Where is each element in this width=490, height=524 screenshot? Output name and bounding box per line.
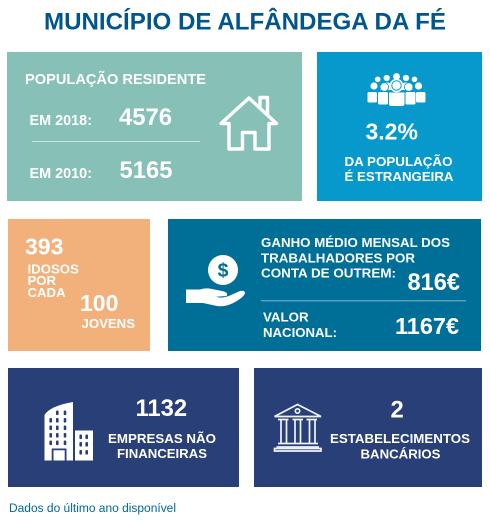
- caption: foreign population: É ESTRANGEIRA: [344, 169, 454, 184]
- caption: foreign population: [344, 154, 454, 184]
- caption: companies: FINANCEIRAS: [117, 446, 207, 461]
- value: elderly: 393: [25, 234, 63, 260]
- caption: companies: [108, 431, 216, 461]
- panel: resident population: [7, 52, 302, 201]
- caption: companies: EMPRESAS NÃO: [108, 431, 216, 446]
- icon: crowd of people: [368, 73, 426, 106]
- label: elderly per: IDOSOS: [28, 261, 79, 276]
- value: foreign share: 3.2%: [366, 118, 418, 144]
- label: young: JOVENS: [82, 316, 135, 331]
- value: 2018: 4576: [119, 104, 172, 131]
- label: 2010: EM 2010:: [30, 166, 92, 182]
- panel: foreign population: [317, 52, 482, 201]
- title: MUNICÍPIO DE ALFÂNDEGA DA FÉ: [44, 8, 446, 36]
- label: 2018: EM 2018:: [30, 113, 92, 129]
- heading: earnings: TRABALHADORES POR: [261, 250, 415, 265]
- icon: house: [221, 98, 276, 149]
- heading: earnings: [261, 235, 450, 280]
- label: elderly per: POR: [28, 273, 57, 288]
- label: national value: VALOR: [263, 310, 309, 325]
- heading: resident population: POPULAÇÃO RESIDENTE: [25, 70, 206, 88]
- value: municipal earnings: 816€: [408, 270, 460, 296]
- heading: earnings: GANHO MÉDIO MENSAL DOS: [261, 235, 450, 250]
- heading: earnings: CONTA DE OUTREM:: [261, 265, 396, 280]
- caption: foreign population: DA POPULAÇÃO: [344, 154, 452, 169]
- value: young: 100: [80, 290, 118, 316]
- footnote: Dados do último ano disponível: [9, 501, 176, 515]
- label: elderly per: [28, 261, 79, 300]
- label: national value: NACIONAL:: [263, 325, 337, 340]
- panel: companies: [8, 368, 239, 487]
- panel: ageing ratio: [8, 219, 150, 351]
- icon: office buildings: [44, 402, 93, 460]
- value: companies: 1132: [136, 395, 187, 422]
- label: national value: [263, 310, 337, 340]
- caption: branches: BANCÁRIOS: [360, 447, 441, 462]
- value: national earnings: 1167€: [395, 313, 459, 339]
- icon: bank building: [274, 404, 321, 451]
- caption: branches: [330, 431, 470, 462]
- icon: hand holding coin: [186, 255, 245, 306]
- panel: monthly earnings: [168, 219, 481, 351]
- caption: branches: ESTABELECIMENTOS: [330, 431, 470, 446]
- value: branches: 2: [390, 396, 404, 423]
- label: elderly per: CADA: [28, 285, 66, 300]
- icon: hand holding coin: $: [218, 260, 229, 282]
- panel: bank branches: [254, 368, 482, 487]
- value: 2010: 5165: [120, 157, 172, 184]
